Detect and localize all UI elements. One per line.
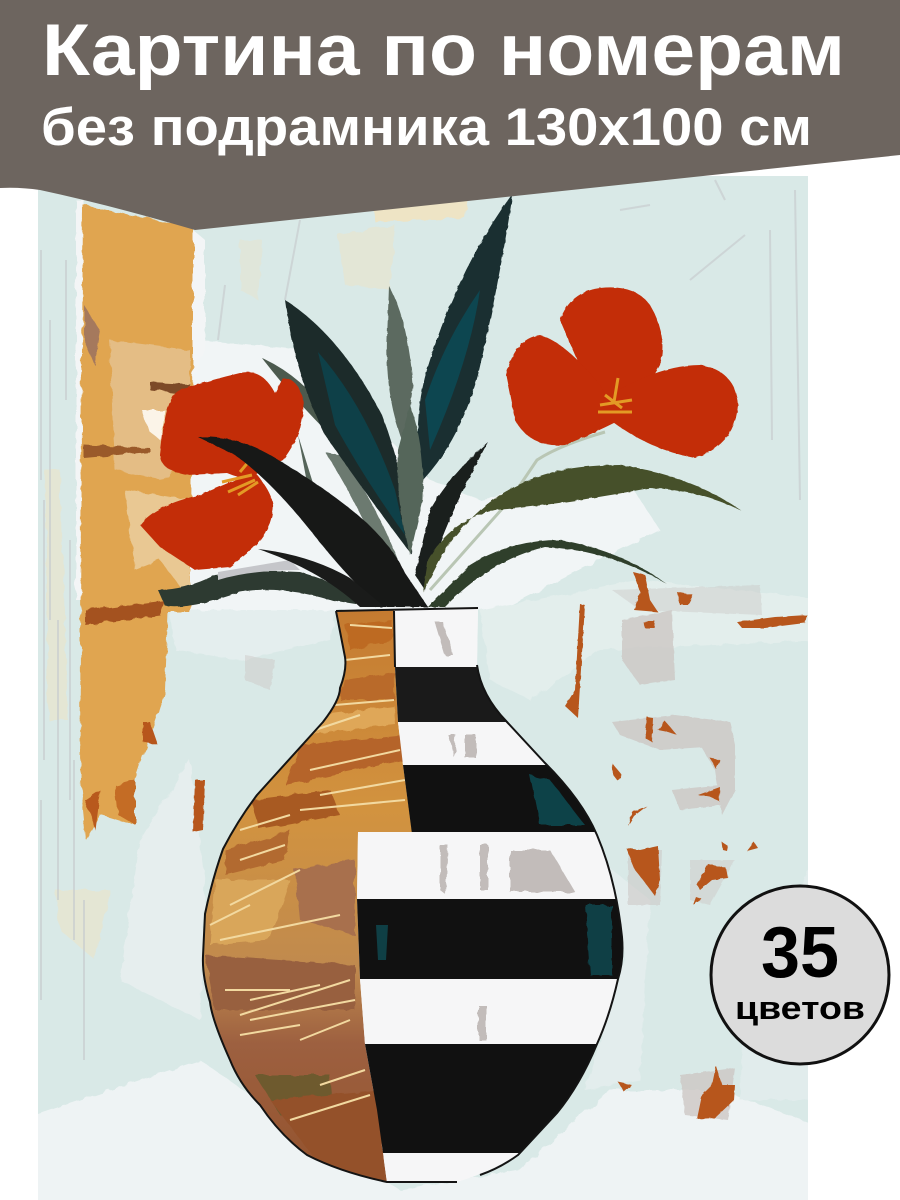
stripe black 1 <box>395 667 510 722</box>
petal left <box>506 335 620 445</box>
grey scratch strokes <box>41 180 800 1060</box>
leaf: centre green <box>398 405 423 555</box>
left flower <box>140 372 303 570</box>
vase crackle lines <box>210 625 405 1120</box>
vase brown textured half <box>190 605 412 1190</box>
right flower stamens <box>598 378 632 412</box>
stripe black 3 <box>357 899 630 979</box>
leaf: tall teal highlight <box>425 290 480 450</box>
petal upper <box>160 372 303 480</box>
painting background <box>38 176 808 1200</box>
leaf: lower left green <box>158 571 375 607</box>
left flower stamens <box>222 460 258 495</box>
leaf: grey back left <box>262 358 365 470</box>
vase white body <box>203 608 622 1182</box>
petal right <box>610 365 738 458</box>
panel: painting <box>20 176 830 1200</box>
leaf: dark teal centre <box>318 352 405 535</box>
leaf: small grey green <box>387 286 413 448</box>
stripe black 4 <box>365 1044 610 1153</box>
ochre band shading <box>84 305 190 830</box>
title: Картина по номерам <box>42 10 845 91</box>
pale ochre strokes <box>45 190 470 960</box>
pale white wash areas <box>20 200 830 1200</box>
stripe white 4 <box>360 980 365 1044</box>
grey paint marks on white stripes <box>435 622 575 1040</box>
stripe white 3 <box>357 832 596 897</box>
plant <box>140 193 742 607</box>
badge label: цветов <box>735 990 865 1026</box>
vase outline <box>203 608 622 1182</box>
leaf: dark right <box>415 442 488 590</box>
rust paint flecks and grey patches <box>143 572 807 1120</box>
leaf: grey shadow <box>218 560 300 580</box>
petal lower <box>140 470 273 570</box>
leaf: lower right <box>428 540 667 607</box>
header banner <box>0 0 900 230</box>
leaf: tall teal <box>418 193 513 480</box>
vase brown patches <box>205 620 405 1185</box>
teal accents <box>530 775 585 825</box>
leaf: pale grey stem <box>298 435 335 540</box>
vase <box>190 605 630 1190</box>
leaf: lower black <box>258 549 385 607</box>
petal top <box>560 287 662 410</box>
badge: 35 colours <box>711 886 889 1064</box>
ochre vertical band <box>80 205 193 840</box>
stripe white 2 <box>398 722 406 765</box>
badge circle <box>711 886 889 1064</box>
badge number: 35 <box>761 913 839 993</box>
subtitle: без подрамника 130х100 см <box>41 98 812 157</box>
banner shape <box>0 0 900 230</box>
stripe white 5 <box>383 1153 387 1181</box>
stripe black 2 <box>403 765 594 832</box>
leaf: grey green slim <box>325 452 400 565</box>
leaf: dark teal left <box>285 300 412 555</box>
vase stripes <box>357 605 630 1190</box>
leaf: right olive <box>423 465 742 592</box>
leaf: black big <box>198 437 428 607</box>
right flower <box>506 287 738 458</box>
stripe white neck <box>394 610 395 611</box>
flower stems <box>430 432 605 590</box>
